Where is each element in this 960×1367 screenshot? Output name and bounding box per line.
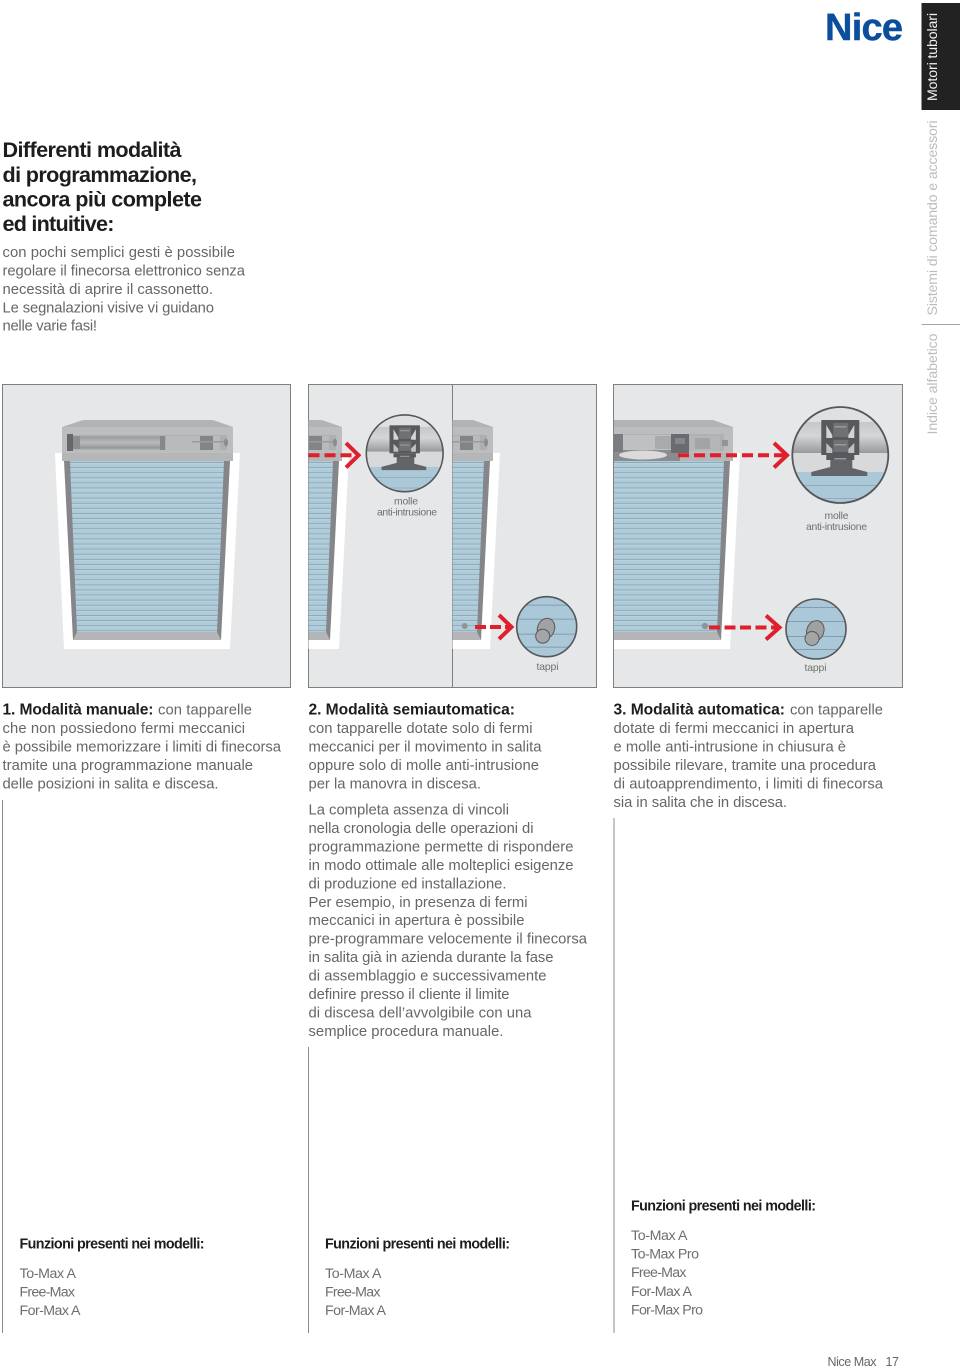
models list: column 3: To-Max A: [631, 1228, 688, 1244]
text: modalità automatica: con tapparelle: [790, 703, 883, 719]
models list: column 1: For-Max A: [20, 1303, 81, 1319]
text: modalità manuale: è possibile memorizzare i limiti di finecorsa: [2, 740, 282, 756]
models list: column 3: Funzioni presenti nei modelli:: [631, 1199, 816, 1215]
label: molle anti-intrusione, panel 3: [806, 511, 867, 533]
side tab: Indice alfabetico: Indice alfabetico: [925, 333, 941, 434]
panel 3: modalità automatica: [613, 384, 903, 688]
text: modalità semiautomatica: 2. Modalità semiautomatica:: [308, 702, 515, 719]
models list: column 2: Funzioni presenti nei modelli:: [325, 1237, 510, 1253]
text: modalità automatica: sia in salita che in discesa.: [614, 795, 787, 811]
side tab: Motori tubolari: Motori tubolari: [925, 13, 941, 101]
models list: column 2: To-Max A: [325, 1266, 382, 1282]
label: molle anti-intrusione, panel 2: molle: [394, 496, 418, 508]
text: modalità semiautomatica: pre-programmare velocemente il finecorsa: [308, 932, 588, 948]
models list: column 3: Free-Max: [631, 1265, 686, 1281]
icon: molle anti-intrusione detail, panel 2: [366, 415, 443, 492]
text: modalità automatica: 3. Modalità automatica:: [614, 702, 785, 719]
arrow: to molle, panel 2: [308, 443, 358, 468]
arrow: to tappi, panel 3: [709, 616, 780, 640]
models list: column 1: Free-Max: [20, 1285, 75, 1301]
text: modalità semiautomatica: di discesa dell’avvolgibile con una: [308, 1006, 532, 1022]
text: modalità semiautomatica: oppure solo di molle anti-intrusione: [308, 758, 539, 774]
text: modalità automatica: e molle anti-intrusione in chiusura è: [614, 740, 846, 756]
Nice logo: Nice: [825, 7, 903, 49]
text: modalità semiautomatica: di produzione ed installazione.: [308, 876, 506, 892]
text: modalità manuale: che non possiedono fermi meccanici: [2, 721, 245, 737]
footer: page number: [828, 1355, 899, 1367]
models list: column 3: For-Max A: [631, 1284, 693, 1300]
text: modalità semiautomatica: semplice procedura manuale.: [308, 1024, 504, 1040]
models list: column 3: To-Max Pro: [631, 1247, 699, 1263]
intro text: regolare il finecorsa elettronico senza: [2, 263, 246, 279]
intro text: Le segnalazioni visive vi guidano: [2, 300, 214, 316]
text: modalità semiautomatica: in salita già in azienda durante la fase: [308, 950, 554, 966]
models list: column 2: For-Max A: [325, 1303, 387, 1319]
text: modalità semiautomatica: programmazione permette di rispondere: [308, 839, 574, 855]
label: molle anti-intrusione, panel 3: anti-intrusione: [806, 522, 867, 533]
text: modalità automatica: [614, 702, 884, 811]
label: molle anti-intrusione, panel 3: molle: [824, 511, 849, 522]
text: modalità manuale: con tapparelle: [158, 703, 252, 719]
title: [2, 137, 202, 236]
arrow: to molle, panel 3: [678, 443, 787, 468]
models list: column 2: [325, 1237, 510, 1319]
text: modalità automatica: dotate di fermi meccanici in apertura: [614, 721, 855, 737]
panel 1: modalità manuale: [2, 384, 290, 688]
panel 2: modalità semiautomatica, molle: [308, 384, 452, 688]
text: modalità semiautomatica: [308, 702, 588, 1040]
side tab: Sistemi di comando e accessori: Sistemi di comando e accessori: [925, 120, 941, 316]
title: Differenti modalità: [2, 137, 182, 162]
text: modalità automatica: di autoapprendimento, i limiti di finecorsa: [614, 776, 884, 792]
intro text: con pochi semplici gesti è possibile: [2, 245, 235, 261]
label: tappi, panel 2: tappi: [536, 662, 558, 673]
text: modalità semiautomatica: nella cronologia delle operazioni di: [308, 821, 534, 837]
title: ed intuitive:: [2, 211, 114, 236]
icon: molle anti-intrusione detail, panel 3: [792, 407, 888, 503]
intro text: [2, 245, 246, 335]
models list: column 1: To-Max A: [20, 1266, 77, 1282]
arrow: to tappi, panel 2: [475, 615, 512, 639]
label: tappi, panel 3: tappi: [804, 663, 826, 674]
text: modalità semiautomatica: La completa assenza di vincoli: [308, 802, 509, 818]
intro text: nelle varie fasi!: [2, 319, 97, 335]
text: modalità manuale: [2, 702, 282, 792]
text: modalità semiautomatica: per la manovra in discesa.: [308, 776, 481, 792]
text: modalità automatica: possibile rilevare, tramite una procedura: [614, 758, 877, 774]
text: modalità semiautomatica: Per esempio, in presenza di fermi: [308, 895, 528, 911]
text: modalità semiautomatica: definire presso il cliente il limite: [308, 987, 510, 1003]
models list: column 2: Free-Max: [325, 1285, 380, 1301]
text: modalità manuale: delle posizioni in salita e discesa.: [2, 776, 218, 792]
text: modalità semiautomatica: meccanici in apertura è possibile: [308, 913, 524, 929]
text: modalità semiautomatica: meccanici per il movimento in salita: [308, 740, 542, 756]
label: molle anti-intrusione, panel 2: anti-intrusione: [377, 508, 437, 518]
text: modalità manuale: tramite una programmazione manuale: [2, 758, 253, 774]
text: modalità semiautomatica: di assemblaggio e successivamente: [308, 969, 546, 985]
title: ancora più complete: [2, 186, 202, 212]
models list: column 1: Funzioni presenti nei modelli:: [20, 1237, 204, 1253]
models list: column 3: [631, 1199, 816, 1318]
icon: tappi detail, panel 2: [516, 597, 578, 657]
models list: column 3: For-Max Pro: [631, 1302, 703, 1318]
intro text: necessità di aprire il cassonetto.: [2, 282, 213, 298]
title: di programmazione,: [2, 162, 197, 187]
side tab: Motori tubolari: [922, 3, 960, 110]
text: modalità semiautomatica: in modo ottimale alle molteplici esigenze: [308, 858, 574, 874]
text: modalità manuale: 1. Modalità manuale:: [2, 702, 154, 719]
icon: tappi detail, panel 3: [785, 599, 847, 659]
text: modalità semiautomatica: con tapparelle dotate solo di fermi: [308, 721, 532, 737]
models list: column 1: [20, 1237, 204, 1319]
panel 2: modalità semiautomatica, tappi: [452, 384, 597, 688]
label: molle anti-intrusione, panel 2: [377, 496, 437, 518]
